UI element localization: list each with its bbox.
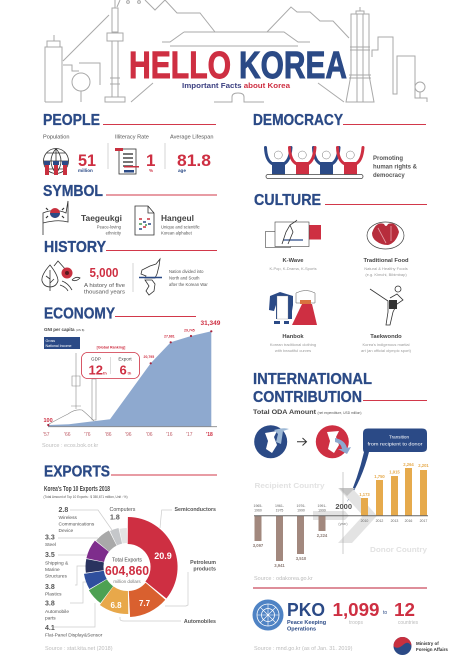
callout: gross national income: Gross (46, 339, 55, 343)
icon: flag (43, 201, 68, 235)
panel: people: Illiteracy Rate (115, 134, 149, 140)
donut labels left: 4.1 (45, 625, 55, 632)
chart axis labels (43, 432, 213, 438)
logo: ministry of foreign affairs (394, 637, 448, 655)
panel: culture: K-Wave (282, 258, 304, 264)
panel: PKO: Source : mnd.go.kr (as of Jan. 31. 2019) (254, 646, 353, 652)
panel: history: Nation divided into (169, 269, 204, 274)
chart axis labels: '16 (166, 432, 173, 438)
panel: culture: Traditional Food (363, 258, 409, 264)
panel: PKO: to (383, 610, 387, 616)
donut labels right: products (193, 566, 216, 572)
chart axis labels: '76 (84, 432, 91, 438)
panel: symbol: Taegeukgi (81, 214, 122, 223)
icon: k-wave (266, 220, 321, 248)
donut labels left (45, 507, 103, 638)
panel: culture: Hanbok (282, 334, 304, 340)
panel: people: % (149, 168, 153, 173)
panel: culture: Natural & Healthy Foods (364, 266, 408, 271)
donut labels left: Device (58, 528, 73, 534)
ODA bar chart: 2012 (376, 519, 383, 523)
panel: people: Population (43, 134, 69, 140)
panel: history: 5,000 (90, 266, 119, 280)
ODA bar chart: 1961- (275, 504, 285, 508)
donut labels right: Computers (110, 507, 136, 513)
donut labels right: Petroleum (190, 560, 216, 566)
panel: people: million (78, 168, 93, 173)
panel: symbol: Hangeul (161, 214, 194, 223)
callout: global ranking: Export (118, 356, 132, 362)
panel: culture: Korea's indigenous martial (362, 342, 410, 347)
donut labels left: Flat-Panel Display&Sensor (45, 632, 103, 638)
panel: culture: with beautiful curves (275, 348, 311, 353)
heading: international contribution: INTERNATIONAL (253, 371, 372, 388)
icon: tree and flower (42, 261, 80, 291)
heading: exports: EXPORTS (44, 464, 110, 480)
title: HELLO (129, 45, 231, 87)
donut labels left: parts (45, 616, 56, 622)
ODA bar chart: 2000 (335, 502, 352, 511)
icon: Korean peninsula divided (139, 259, 162, 295)
heading: economy: ECONOMY (44, 306, 116, 322)
ODA bar chart: 1965- (254, 504, 263, 508)
panel: history: A history of five (84, 283, 125, 289)
ODA bar chart: 1960 (254, 508, 262, 512)
title: KOREA (239, 45, 347, 87)
callout: gross national income (44, 337, 80, 349)
ODA bar chart: 1,173 (359, 492, 370, 497)
panel: PKO: Operations (287, 626, 316, 632)
callout: global ranking: GDP (91, 356, 101, 362)
ODA bar chart: 1,750 (374, 474, 385, 479)
callout: global ranking: 6 (120, 362, 127, 378)
callout: transition (347, 428, 427, 502)
donut chart: 7.7 (139, 599, 151, 608)
donut labels left: Steel (45, 542, 56, 548)
panel: exports (44, 464, 217, 652)
callout: global ranking: th (103, 370, 107, 376)
donut labels left: 3.5 (45, 552, 55, 559)
panel: history: thousand years (84, 290, 125, 296)
donut labels left: 2.8 (58, 507, 68, 514)
logo: ministry of foreign affairs: Foreign Affairs (416, 647, 448, 652)
header skyline (45, 0, 427, 102)
chart data labels: 27,681 (164, 334, 175, 338)
callout: global ranking: th (128, 370, 132, 376)
arrow (297, 438, 306, 446)
panel: symbol (43, 183, 217, 236)
callout: transition: Transition (389, 434, 409, 440)
donut labels left: 3.8 (45, 600, 55, 608)
panel: PKO: countries (398, 620, 419, 626)
panel: economy: GNI per capita (US $) (44, 327, 84, 332)
chart axis labels: '18 (206, 432, 213, 438)
donut labels left: 3.8 (45, 584, 55, 591)
ODA bar chart: 2,264 (403, 462, 414, 467)
donut labels right: 1.8 (110, 514, 120, 522)
panel: history (42, 239, 217, 296)
ODA bar chart: 1,915 (389, 470, 400, 474)
panel: symbol: Korean alphabet (161, 230, 193, 236)
donut labels left: Communications (58, 522, 95, 528)
title (129, 45, 347, 87)
panel: history: after the Korean War (169, 282, 208, 287)
ODA bar chart: 1999 (318, 508, 326, 512)
panel: PKO: Peace Keeping (287, 620, 326, 626)
panel: democracy: human rights & (373, 164, 418, 170)
donut labels left: Plastics (45, 592, 62, 598)
icon: UN emblem (252, 600, 284, 630)
ODA bar chart: 2010 (361, 519, 368, 523)
heading: people: PEOPLE (43, 112, 100, 129)
panel: international contribution: Total ODA Amount (253, 409, 317, 416)
heading: democracy: DEMOCRACY (253, 112, 344, 129)
donut center total (105, 558, 149, 584)
panel: exports: Korea's Top 10 Exports 2018 (44, 486, 110, 493)
callout: global ranking (82, 346, 140, 378)
icon: globe with people (44, 148, 68, 175)
logo: ministry of foreign affairs: Ministry of (416, 641, 439, 646)
panel: people: 1 (146, 151, 155, 170)
panel: PKO: 1,099 (332, 600, 380, 620)
panel: people (43, 112, 216, 175)
donut labels right (110, 507, 216, 625)
donut chart (84, 517, 178, 617)
panel: PKO: PKO (287, 600, 325, 620)
chart axis labels: '66 (64, 432, 71, 438)
panel: international contribution (253, 371, 429, 588)
panel: PKO: 12 (394, 600, 415, 620)
chart data labels: 20,795 (144, 355, 154, 359)
panel: culture: Taekwondo (370, 334, 402, 340)
panel: international contribution: (net expenditure, USD million) (318, 411, 361, 415)
ODA bar chart: 2017 (420, 519, 427, 523)
donut labels left: Marine (45, 567, 60, 573)
panel: people: 81.8 (177, 151, 211, 170)
donut chart: 20.9 (154, 551, 172, 561)
panel: international contribution: Donor Country (370, 545, 428, 554)
ODA bar chart: 2013 (391, 519, 398, 523)
panel: democracy (253, 112, 426, 179)
ODA bar chart: 1991- (318, 504, 327, 508)
heading: history: HISTORY (44, 239, 107, 256)
chart axis labels: '57 (43, 432, 50, 438)
panel: culture: art (an official olympic sport) (361, 348, 412, 353)
panel: international contribution: Recipient Country (254, 481, 325, 490)
panel: history: North and South (169, 276, 200, 280)
donut labels left: Wireless (58, 515, 77, 521)
callout: gross national income: National Income (46, 344, 71, 348)
ODA bar chart: 3,941 (274, 563, 285, 568)
panel: democracy: democracy (373, 173, 405, 179)
donut labels left: 3.3 (45, 534, 55, 542)
ODA bar chart: 1990 (297, 508, 305, 512)
donut center total: 604,860 (105, 563, 149, 578)
donut labels left: Automobile (45, 609, 69, 615)
heading: international contribution (253, 371, 372, 406)
panel: international contribution: Source : odakorea.go.kr (254, 576, 313, 582)
chart data labels (44, 320, 221, 424)
panel: PKO (252, 600, 419, 652)
icon: document and pen (115, 148, 139, 174)
chart axis labels: '17 (186, 432, 193, 438)
icon: hangeul document (135, 206, 154, 235)
heading: symbol: SYMBOL (43, 183, 103, 200)
heading: culture: CULTURE (254, 192, 321, 209)
donut labels left: Structures (45, 574, 67, 580)
heading: international contribution: CONTRIBUTION (253, 389, 362, 406)
donut leader lines (53, 510, 188, 627)
panel: culture: (e.g. Kimchi, Bibimbap) (365, 272, 407, 277)
ODA bar chart: 1976- (297, 504, 306, 508)
donut labels left: Shipping & (45, 560, 69, 566)
chart axis labels: '06 (146, 432, 153, 438)
donut center total: Total Exports (112, 558, 142, 564)
panel: democracy: Promoting (373, 156, 403, 162)
ODA bar chart (253, 462, 429, 568)
panel: culture: Korean traditional clothing (270, 342, 316, 347)
ODA bar chart: (year) (338, 522, 348, 526)
panel: PKO: troops (349, 620, 363, 626)
panel: symbol: Peace-loving (97, 224, 122, 230)
icon: people raising hands (266, 148, 363, 178)
area chart: GNI (47, 330, 217, 427)
donut labels right: Automobiles (184, 619, 216, 625)
icon: blue globe (254, 425, 289, 458)
panel: symbol: ethnicity (106, 230, 122, 236)
panel: culture: K-Pop, K-Drama, K-Sports (269, 266, 317, 271)
ODA bar chart: 2,224 (317, 533, 328, 538)
ODA bar chart: 3,097 (253, 543, 264, 548)
chart axis labels: '86 (105, 432, 112, 438)
panel: exports: Source : stat.kita.net (2018) (45, 646, 113, 652)
icon: taekwondo (370, 286, 403, 325)
donut center total: million dollars (113, 579, 141, 584)
callout: transition: from recipient to donor (368, 442, 423, 446)
ODA bar chart: 2016 (405, 519, 412, 523)
panel: economy: Source : ecos.bok.or.kr (42, 443, 98, 449)
panel: people: 51 (78, 151, 96, 170)
donut chart: 6.8 (110, 601, 122, 610)
icon: kimchi (367, 222, 404, 249)
subtitle: Important Facts about Korea (182, 81, 291, 90)
chart axis labels: '96 (125, 432, 132, 438)
panel: people: Average Lifespan (170, 134, 213, 140)
donut labels right: Semiconductors (174, 507, 216, 513)
panel: people: age (178, 168, 186, 173)
panel: culture (254, 192, 427, 353)
ODA bar chart: 1975 (276, 508, 283, 512)
panel: economy (42, 306, 221, 449)
icon: red globe (316, 425, 351, 458)
panel: symbol: Unique and scientific (161, 224, 200, 230)
ODA bar chart: 3,510 (296, 556, 307, 561)
panel: exports: (Total Amount of Top 10 Exports : $ 350,671 million, Unit : %) (44, 495, 128, 499)
chart data labels: 29,745 (184, 328, 195, 332)
callout: global ranking: [Global Ranking] (97, 346, 125, 350)
ODA bar chart: 2,201 (418, 463, 429, 468)
chart data labels: 100 (44, 418, 53, 424)
icon: hanbok (269, 290, 317, 325)
chart data labels: 31,349 (200, 320, 221, 327)
callout: global ranking: 12 (88, 362, 103, 378)
